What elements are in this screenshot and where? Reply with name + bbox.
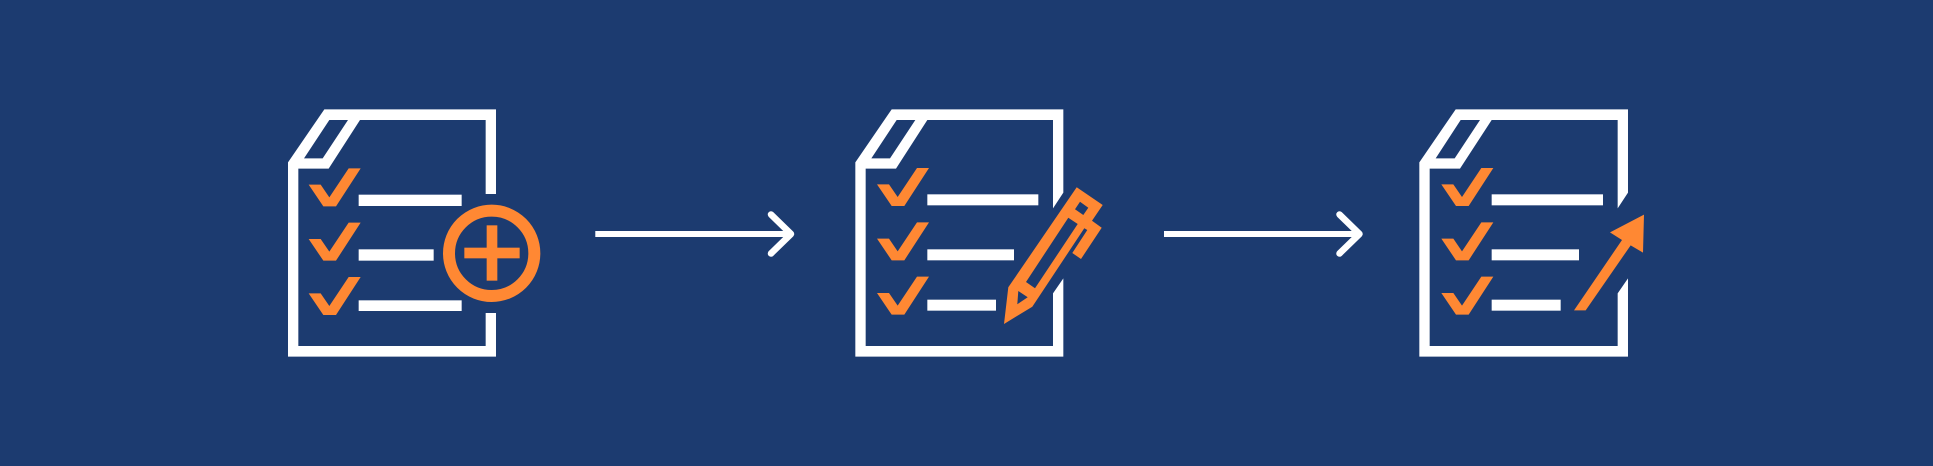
arrow: step one to step two	[595, 214, 791, 254]
plus badge	[449, 211, 534, 296]
arrow: step two to step three	[1164, 214, 1360, 254]
pencil	[1004, 187, 1103, 324]
icon: checklist with growth arrow	[1419, 109, 1644, 357]
growth arrow	[1574, 215, 1644, 310]
check marks	[309, 168, 361, 315]
document outline	[855, 109, 1063, 357]
document outline	[1419, 109, 1628, 357]
icon: checklist with pencil	[855, 109, 1103, 357]
icon: checklist with plus	[288, 109, 534, 357]
check marks	[877, 168, 929, 315]
document outline	[288, 109, 496, 357]
list lines	[1492, 194, 1603, 311]
list lines	[359, 195, 462, 311]
check marks	[1441, 168, 1493, 315]
list lines	[927, 194, 1038, 311]
